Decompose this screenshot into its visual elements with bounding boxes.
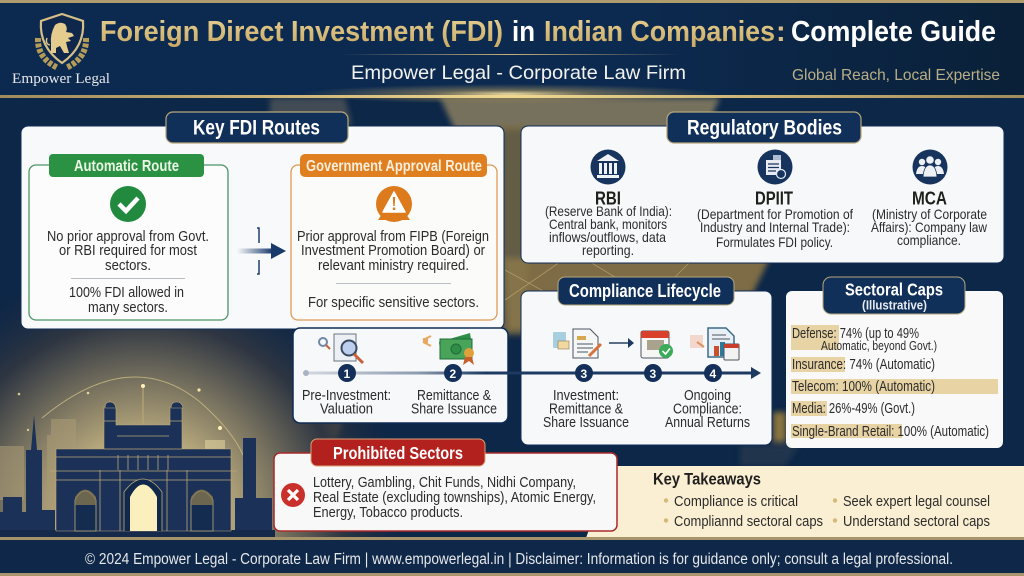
arrow: between icons — [609, 338, 634, 348]
background world map — [270, 98, 800, 466]
footer — [0, 537, 1024, 576]
card: Automatic Route: No prior approval from Govt. — [47, 228, 209, 245]
card: Automatic Route: or RBI required for most — [59, 242, 198, 259]
card: Government Approval Route: Investment Promotion Board) or — [301, 242, 485, 259]
icon: warning — [376, 186, 412, 222]
tagline: Global Reach, Local Expertise — [792, 67, 1000, 84]
step 1: Pre-Investment: — [302, 388, 391, 404]
panel: Prohibited Sectors — [274, 439, 617, 531]
bullet list: Seek expert legal counsel — [843, 493, 990, 510]
body: MCA: Affairs): Company law — [871, 219, 988, 235]
title: in — [512, 16, 535, 48]
title: Indian Companies — [544, 16, 775, 48]
title: Foreign Direct Investment (FDI) — [100, 16, 503, 48]
panel: Prohibited Sectors: Energy, Tobacco products. — [313, 505, 463, 521]
body: DPIIT: DPIIT — [755, 188, 793, 208]
step 1: 1 — [344, 367, 350, 381]
card: Automatic Route: 100% FDI allowed in — [69, 284, 184, 301]
title: : — [776, 16, 786, 48]
card: Government Approval Route: For specific sensitive sectors. — [308, 294, 479, 311]
body: RBI: reporting. — [582, 242, 634, 258]
illustration: Gateway of India skyline — [0, 377, 275, 538]
heading: Regulatory Bodies: Regulatory Bodies — [687, 116, 842, 140]
step 3: calendar: 3 — [650, 367, 656, 381]
row: Defense — [791, 325, 937, 353]
row: Telecom: Telecom: 100% (Automatic) — [792, 379, 935, 395]
bullet list: Understand sectoral caps — [843, 513, 990, 530]
icon: annual report and calendar — [690, 328, 739, 360]
gateway scene glow — [0, 255, 400, 538]
timeline: compliance steps — [302, 328, 761, 431]
subtitle: Empower Legal - Corporate Law Firm — [351, 62, 686, 84]
heading: Key FDI Routes — [166, 112, 348, 143]
card: Automatic Route — [29, 154, 228, 320]
step 3: investment: Investment: — [553, 388, 619, 404]
step 4 — [665, 328, 750, 431]
body: DPIIT: Industry and Internal Trade): — [700, 219, 850, 235]
heading: Key FDI Routes: Key FDI Routes — [193, 116, 320, 140]
body: MCA: MCA — [912, 188, 947, 208]
row: Media: Media: 26%-49% (Govt.) — [792, 401, 915, 417]
icon: people — [912, 150, 948, 184]
card: Government Approval Route: Prior approval from FIPB (Foreign — [297, 228, 489, 245]
body: MCA — [871, 150, 988, 248]
title: Complete Guide — [791, 16, 996, 48]
step 3: investment: Share Issuance — [543, 415, 629, 431]
heading: Prohibited Sectors: Prohibited Sectors — [333, 443, 463, 463]
step 2: 2 — [450, 367, 456, 381]
heading: Sectoral Caps: Sectoral Caps — [845, 280, 943, 300]
heading: Prohibited Sectors — [311, 439, 485, 466]
step 1: Valuation — [320, 402, 373, 418]
card: Automatic Route: many sectors. — [88, 299, 168, 316]
step 4: 4 — [710, 367, 716, 381]
heading: Sectoral Caps: (Illustrative) — [862, 298, 927, 312]
title — [100, 16, 996, 48]
body: MCA: (Ministry of Corporate — [872, 206, 987, 222]
panel: Key Takeaways: Key Takeaways — [653, 470, 761, 488]
panel: Prohibited Sectors: Lottery, Gambling, Chit Funds, Nidhi Company, — [313, 475, 576, 491]
icon: magnifier on document — [319, 334, 363, 363]
logo name: Empower Legal — [12, 71, 110, 87]
icon: Empower Legal crest logo — [12, 14, 110, 87]
icon: policy document — [758, 150, 792, 184]
panel: lifecycle first half — [293, 328, 508, 423]
header band — [0, 0, 1024, 104]
row: Defense: Defense: 74% (up to 49% — [792, 326, 919, 342]
arrow: route comparison — [237, 228, 286, 274]
panel: Prohibited Sectors: Real Estate (excluding townships), Atomic Energy, — [313, 490, 596, 506]
bullet list: Compliannd sectoral caps — [674, 513, 823, 530]
body: RBI: RBI — [595, 188, 621, 208]
card: Government Approval Route: Government Approval Route — [306, 158, 482, 175]
heading: Regulatory Bodies — [667, 112, 861, 143]
panel: Key Takeaways — [586, 466, 1024, 538]
icon: green check — [110, 186, 146, 222]
body: RBI: (Reserve Bank of India): — [545, 203, 672, 219]
body: DPIIT — [697, 150, 853, 250]
row: Insurance: Insurance: 74% (Automatic) — [792, 357, 935, 373]
bullet list: Compliance is critical — [674, 493, 798, 510]
icon: forms with pencil — [553, 329, 601, 358]
panel: Key FDI Routes — [21, 112, 504, 329]
step 3: investment: Remittance & — [549, 402, 623, 418]
body: RBI — [545, 150, 672, 258]
step 2: Share Issuance — [411, 402, 497, 418]
icon: bank — [590, 150, 626, 184]
step 2: Remittance & — [417, 388, 491, 404]
step 4: Annual Returns — [665, 415, 750, 431]
step 3: investment: 3 — [580, 367, 588, 381]
icon: banknote with ribbon — [423, 333, 474, 365]
step 3: calendar — [641, 331, 673, 382]
step 4: Ongoing — [684, 388, 731, 404]
body: DPIIT: (Department for Promotion of — [697, 206, 853, 222]
body: DPIIT: Formulates FDI policy. — [716, 234, 833, 250]
step 2 — [411, 333, 497, 418]
body: MCA: compliance. — [897, 232, 961, 248]
icon: red cross — [281, 483, 305, 507]
bullet list — [664, 493, 990, 530]
heading: Compliance Lifecycle: Compliance Lifecycle — [569, 281, 721, 301]
heading: Compliance Lifecycle — [558, 277, 734, 305]
step 3: investment — [543, 329, 629, 431]
heading: Sectoral Caps — [823, 277, 965, 314]
body: RBI: inflows/outflows, data — [549, 229, 666, 245]
row: Defense: Automatic, beyond Govt.) — [821, 338, 937, 353]
step 4: Compliance: — [673, 402, 742, 418]
card: Automatic Route: sectors. — [105, 257, 151, 274]
card: Government Approval Route: relevant ministry required. — [318, 257, 469, 274]
card: Government Approval Route — [291, 154, 497, 320]
step 1 — [302, 334, 391, 418]
panel: Sectoral Caps — [786, 277, 1003, 448]
body: RBI: Central bank, monitors — [549, 216, 667, 232]
card: Automatic Route: Automatic Route — [74, 158, 179, 175]
panel: Compliance Lifecycle — [521, 277, 772, 445]
panel: Regulatory Bodies — [521, 112, 1004, 263]
icon: calendar check — [641, 331, 673, 358]
